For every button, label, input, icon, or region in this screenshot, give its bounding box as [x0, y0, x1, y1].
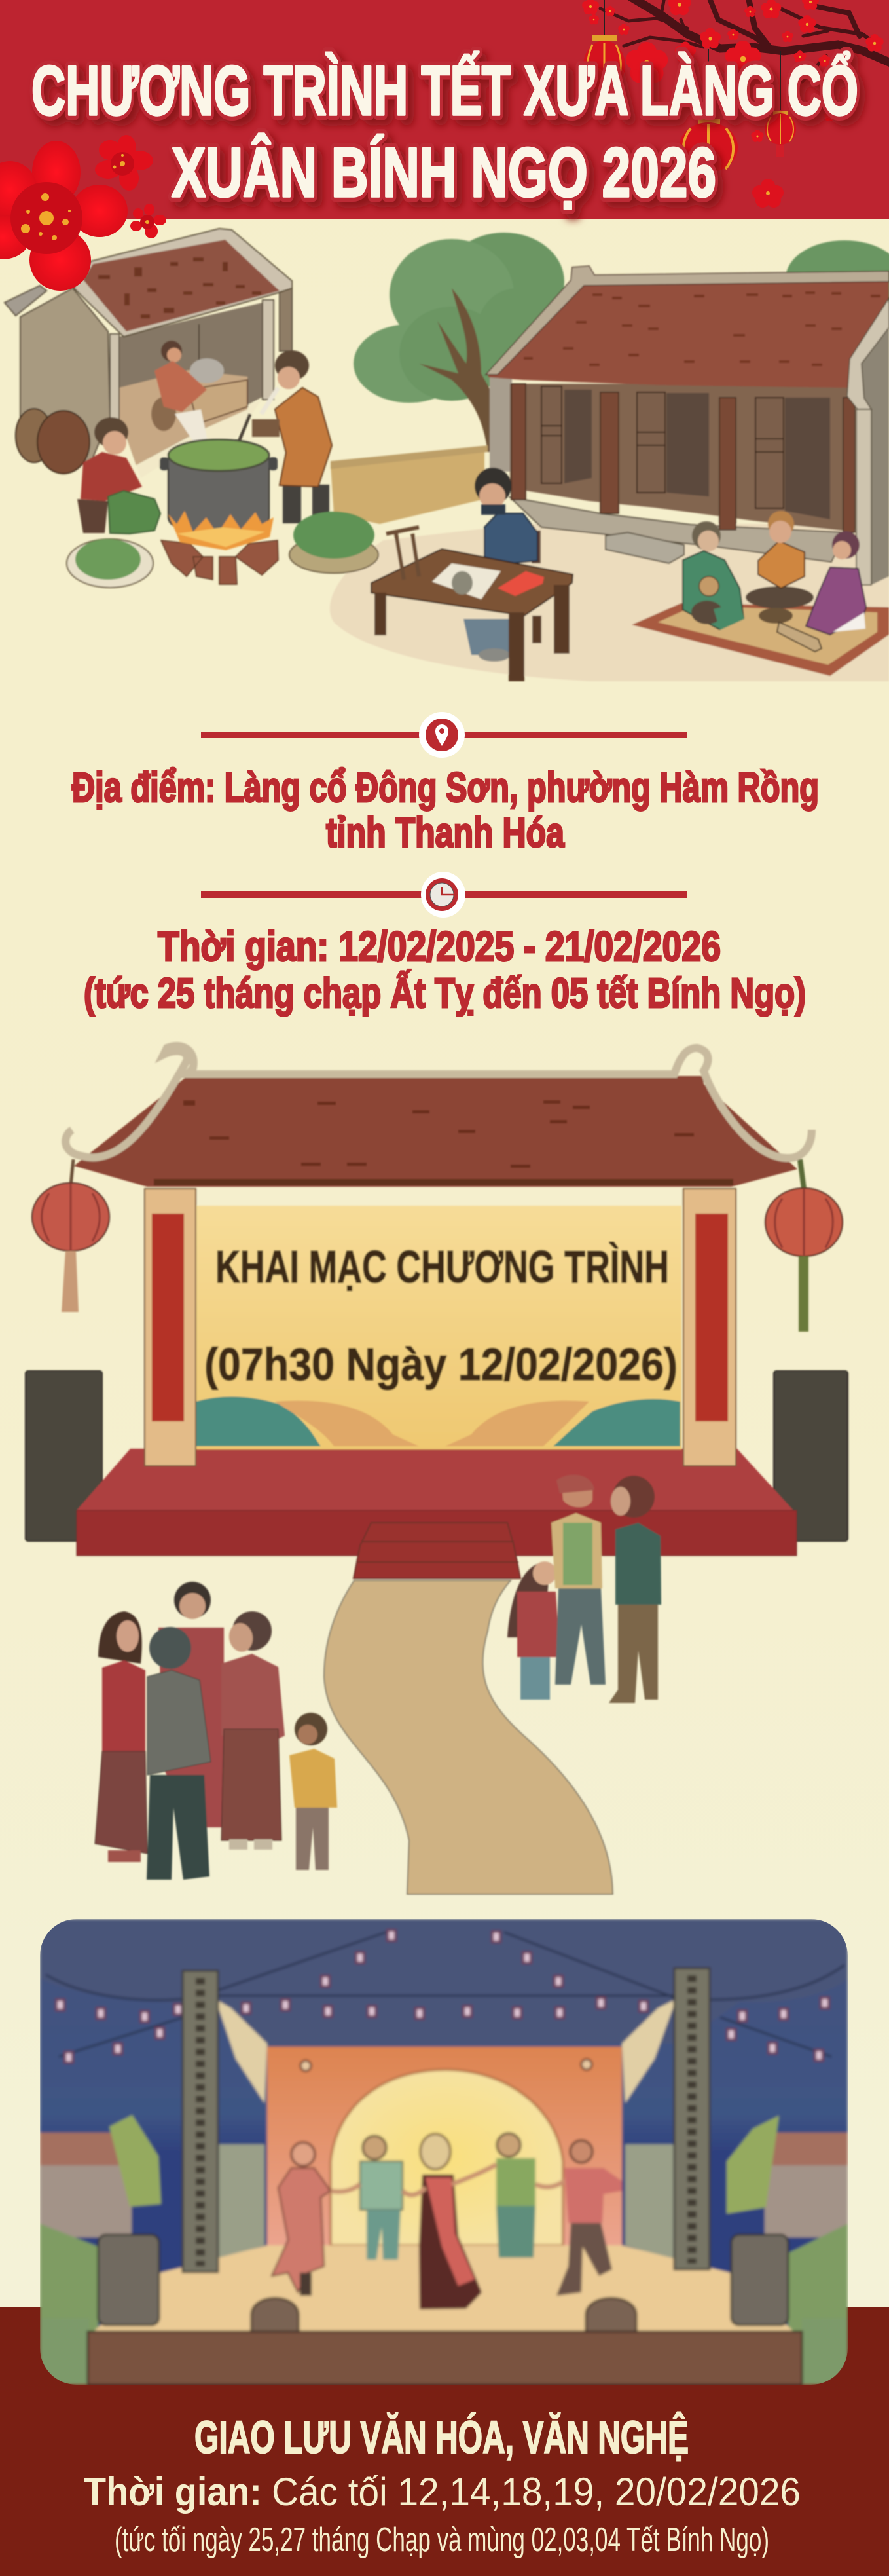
- mat with three musicians: [632, 511, 889, 676]
- title: [31, 51, 858, 212]
- stage front: [88, 2332, 802, 2385]
- blossoms on branch: [582, 0, 884, 142]
- pillars: [145, 1189, 736, 1466]
- dancer 3 center: [419, 2134, 482, 2309]
- location text: [72, 764, 819, 856]
- person: man behind: [158, 1582, 224, 1827]
- logs: [161, 540, 278, 584]
- pot: [160, 439, 278, 534]
- columns: [511, 384, 855, 532]
- string lights: [56, 1930, 829, 2063]
- icon: clock: [421, 872, 465, 918]
- footer time value: Các tối 12,14,18,19, 20/02/2026: [272, 2470, 801, 2514]
- title outline: [31, 51, 858, 212]
- text on backdrop: (07h30 Ngày 12/02/2026): [204, 1339, 678, 1390]
- moon arch: [331, 2070, 563, 2245]
- text on backdrop: [204, 1241, 678, 1390]
- dancer 1: [272, 2142, 331, 2296]
- footer time label: Thời gian:: [84, 2470, 262, 2514]
- illustration: opening stage: [26, 1046, 848, 1894]
- tree: right background: [786, 240, 889, 316]
- left hut: [5, 229, 292, 474]
- illustration: village scene: [5, 229, 889, 681]
- dancer 5: [556, 2140, 622, 2296]
- backdrop screen: [194, 1206, 681, 1449]
- big red flowers: [0, 135, 166, 291]
- musician: orange: [746, 511, 814, 624]
- wall: [331, 445, 488, 524]
- stage lamps: [300, 2061, 311, 2071]
- lantern: right: [765, 1159, 843, 1332]
- person: woman long hair: [95, 1611, 147, 1862]
- leaf bundle: [108, 491, 160, 534]
- plate: rice cakes: [67, 539, 153, 588]
- hut forecourt: [136, 400, 262, 478]
- night sky: [40, 1977, 848, 2328]
- speakers: [98, 2235, 788, 2325]
- person: dark green coat: [609, 1476, 661, 1703]
- fire: [168, 511, 274, 550]
- blossom: lower right: [752, 179, 784, 208]
- basket: leaves: [289, 512, 378, 573]
- text on backdrop: KHAI MẠC CHƯƠNG TRÌNH: [215, 1241, 669, 1292]
- header band: [0, 0, 889, 219]
- dancers: [272, 2133, 622, 2309]
- icon: map pin: [419, 712, 465, 758]
- brush stand: [386, 527, 419, 580]
- path: [324, 1580, 613, 1894]
- lantern: left: [32, 1159, 109, 1312]
- stage floor: [92, 2245, 795, 2333]
- wooden clapper: [777, 622, 822, 652]
- lantern: small: [765, 51, 796, 157]
- flower: large: [0, 141, 128, 291]
- branch with blossoms and lanterns: [582, 0, 889, 208]
- writing table and scholar: [371, 468, 573, 681]
- person: child red: [507, 1561, 560, 1700]
- person: child yellow: [289, 1713, 337, 1870]
- step: [606, 532, 684, 563]
- plinth: [510, 497, 846, 562]
- woman at table: [151, 341, 207, 431]
- time text: Thời gian: 12/02/2025 - 21/02/2026: [158, 923, 721, 970]
- jars: [16, 409, 90, 474]
- divider: time: [201, 872, 687, 918]
- cook man: [230, 350, 332, 523]
- tree: [354, 233, 564, 452]
- table: [371, 549, 573, 616]
- cloth poured: [175, 409, 210, 455]
- trusses: [183, 1968, 710, 2272]
- gable wall right: [848, 305, 889, 585]
- location text: tỉnh Thanh Hóa: [326, 809, 564, 856]
- roof: [65, 1046, 812, 1187]
- main house: [486, 266, 889, 585]
- roof: [488, 272, 889, 388]
- footer band: [0, 2307, 889, 2576]
- stage floor: [77, 1449, 797, 1556]
- divider: location: [201, 712, 687, 758]
- scholar: [463, 468, 541, 662]
- musician: green: [683, 521, 744, 630]
- foliage: [40, 2115, 848, 2385]
- flower: small lower: [130, 204, 166, 238]
- facade: [510, 384, 854, 532]
- title fill: [31, 51, 858, 212]
- person: older woman: [221, 1611, 285, 1850]
- stage steps: [354, 1523, 520, 1578]
- audience: left group: [95, 1582, 337, 1880]
- backdrop: [267, 2047, 622, 2245]
- person: man: [551, 1475, 606, 1685]
- dancer 2: [360, 2136, 403, 2260]
- dancer 4: [496, 2133, 535, 2258]
- person: grey man front: [147, 1627, 211, 1880]
- village roofs and walls: [40, 2133, 848, 2237]
- audience: right group: [507, 1475, 661, 1703]
- lantern: top: [583, 0, 625, 90]
- table and sacks: [189, 380, 247, 424]
- woman kneeling: [77, 417, 142, 533]
- ground: [330, 524, 889, 681]
- time text: [84, 923, 806, 1017]
- arms chain: [331, 2165, 564, 2195]
- lantern: large: [679, 49, 738, 172]
- monitors: [251, 2298, 636, 2333]
- side wings: [215, 1999, 676, 2260]
- canopy: [247, 2019, 672, 2044]
- speakers: [26, 1371, 848, 1541]
- side wall left: [490, 377, 512, 472]
- musician: purple: [806, 531, 866, 635]
- illustration: night performance card: [40, 1919, 848, 2385]
- footer text: [84, 2411, 801, 2559]
- flower: small upper: [95, 135, 153, 191]
